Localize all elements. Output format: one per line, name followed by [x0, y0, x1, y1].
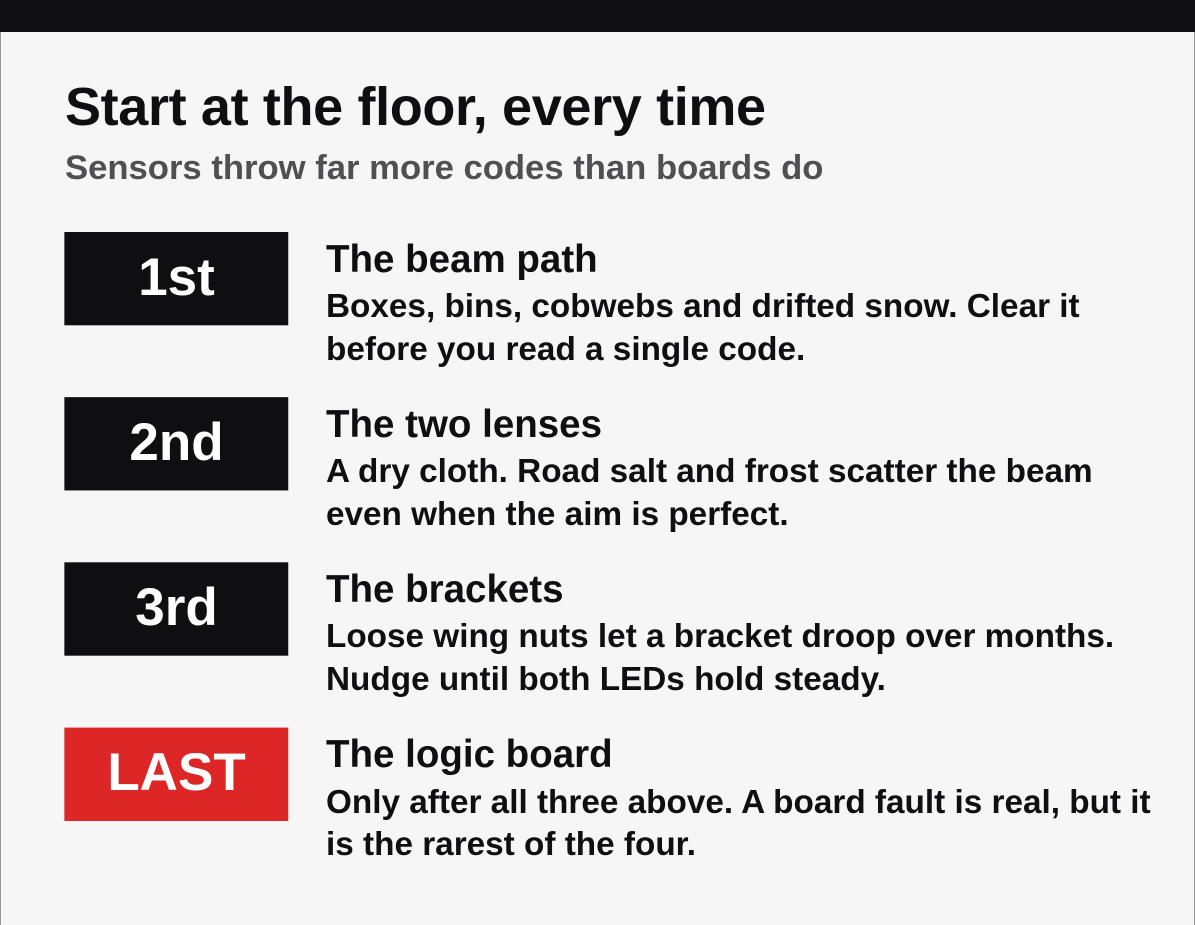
badge: 1st: 1st	[138, 248, 215, 307]
top bar	[0, 0, 1195, 32]
step: last	[64, 728, 1151, 863]
step: 3rd	[64, 562, 1114, 698]
description: the logic board: is the rarest of the four.	[326, 826, 696, 863]
heading: the two lenses: The two lenses	[326, 403, 602, 446]
badge: 2nd: 2nd	[129, 413, 224, 472]
badge: 3rd	[64, 562, 288, 656]
subtitle: Sensors throw far more codes than boards do	[65, 149, 823, 187]
heading: the brackets: The brackets	[326, 568, 564, 611]
title: Start at the floor, every time	[65, 77, 766, 137]
description: the brackets	[326, 618, 1114, 698]
description: the beam path: Boxes, bins, cobwebs and drifted snow. Clear it	[326, 288, 1080, 325]
heading: the beam path: The beam path	[326, 238, 598, 281]
description: the two lenses	[326, 453, 1093, 533]
badge: 1st	[64, 232, 288, 326]
badge: 2nd	[64, 397, 288, 490]
description: the beam path	[326, 288, 1080, 368]
badge: last: LAST	[107, 743, 246, 802]
badge: 3rd: 3rd	[135, 578, 218, 637]
description: the two lenses: even when the aim is perfect.	[326, 496, 789, 533]
badge: last	[64, 728, 288, 821]
heading: the logic board: The logic board	[326, 733, 613, 776]
description: the beam path: before you read a single code.	[326, 330, 805, 368]
left border	[0, 32, 1, 925]
description: the logic board	[326, 784, 1151, 863]
description: the brackets: Loose wing nuts let a bracket droop over months.	[326, 618, 1114, 655]
step: 2nd	[64, 397, 1093, 533]
description: the two lenses: A dry cloth. Road salt and frost scatter the beam	[326, 453, 1093, 490]
description: the brackets: Nudge until both LEDs hold steady.	[326, 661, 886, 698]
right border	[1194, 32, 1195, 925]
description: the logic board: Only after all three above. A board fault is real, but it	[326, 784, 1151, 821]
step: 1st	[64, 232, 1080, 368]
